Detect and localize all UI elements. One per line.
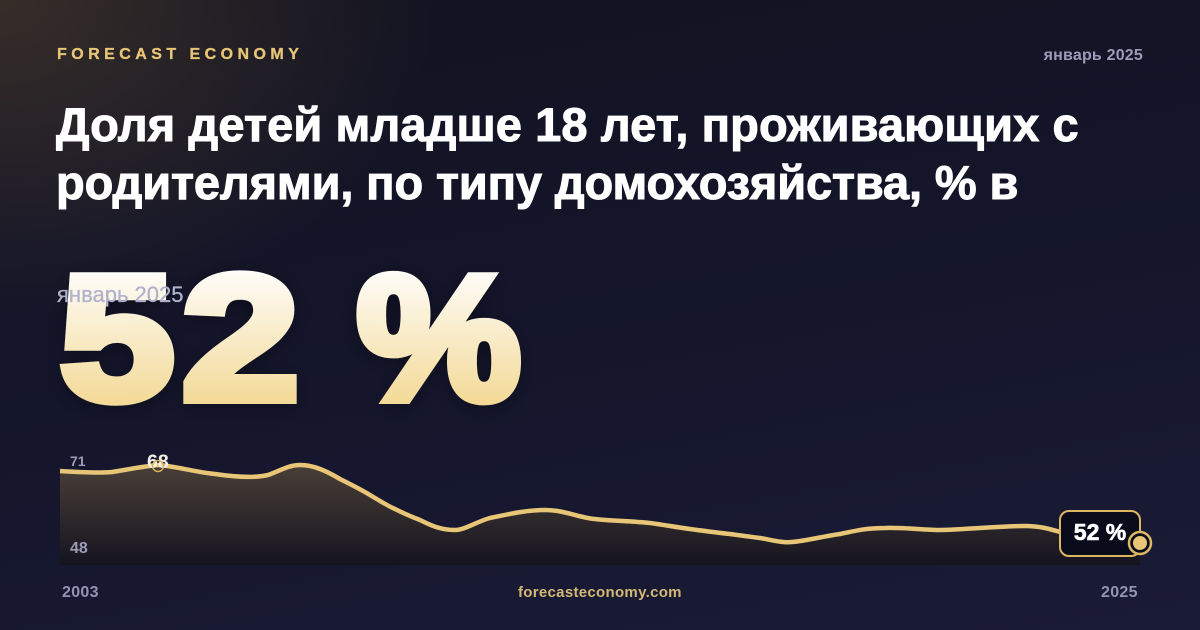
axis min label: 48 (70, 540, 88, 557)
end value callout (1060, 511, 1140, 556)
area line chart (60, 451, 1152, 565)
title: Доля детей младше 18 лет, проживающих с (56, 98, 1079, 151)
axis max label: 71 (70, 453, 86, 469)
end value callout: 52 % (1074, 519, 1126, 545)
x axis start year: 2003 (62, 584, 99, 601)
title (56, 98, 1079, 210)
title: родителями, по типу домохозяйства, % в (56, 156, 1018, 209)
peak marker (152, 460, 164, 472)
x axis end year: 2025 (1101, 584, 1138, 601)
end marker (1129, 532, 1151, 554)
brand label: FORECAST ECONOMY (57, 46, 303, 63)
chart area fill (60, 465, 1140, 565)
date label top right: январь 2025 (1044, 47, 1143, 64)
chart line (60, 465, 1140, 543)
value date label: январь 2025 (57, 282, 184, 307)
peak value label: 68 (147, 451, 169, 473)
big value 52 % (60, 238, 521, 430)
source url: forecasteconomy.com (518, 584, 682, 601)
